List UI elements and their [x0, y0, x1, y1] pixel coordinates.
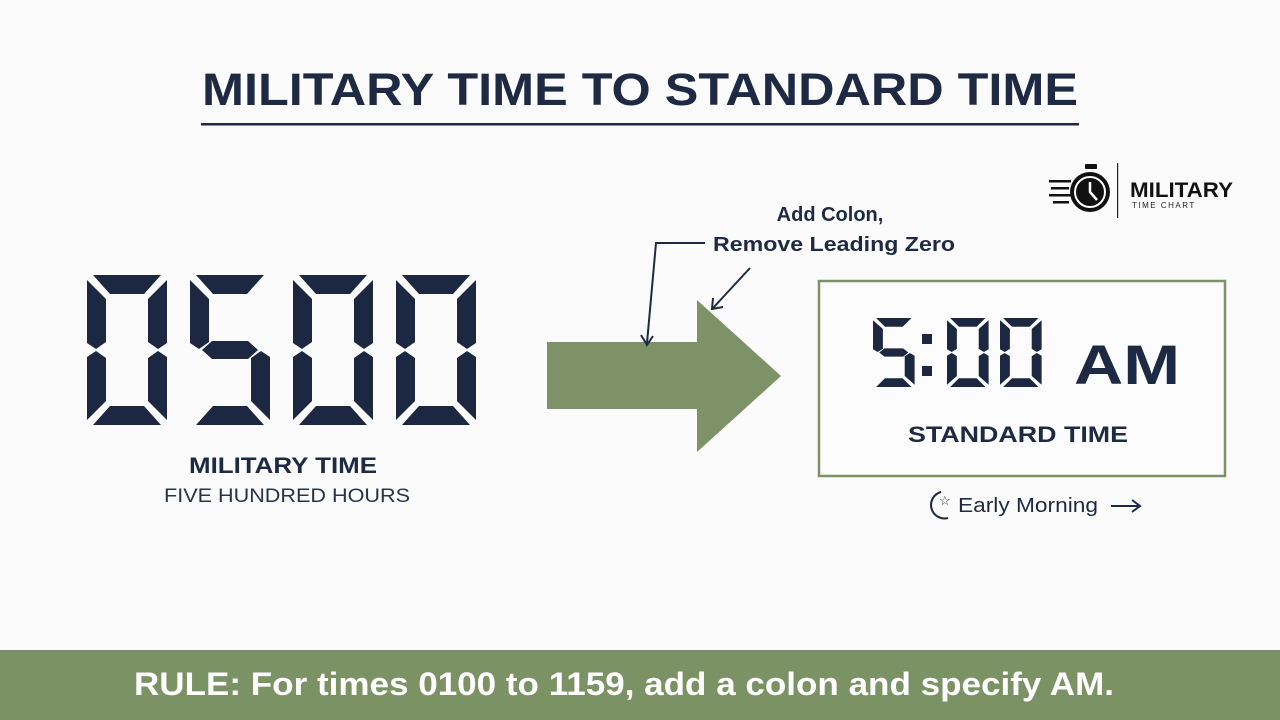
logo: military time chart: MILITARY [1130, 179, 1233, 202]
arrow: conversion [547, 300, 781, 452]
arrow: right [1111, 500, 1140, 512]
panel: standard time: AM [1074, 333, 1180, 396]
military time label: MILITARY TIME [189, 453, 377, 478]
rule banner: RULE: For times 0100 to 1159, add a colon and specify AM. [134, 666, 1114, 702]
early morning note: ☆ [939, 493, 951, 508]
panel: standard time: STANDARD TIME [908, 422, 1128, 447]
early morning note [931, 492, 1140, 518]
icon: stopwatch [1049, 164, 1110, 212]
panel: standard time [819, 281, 1225, 476]
digits 5:00 [873, 318, 1042, 387]
logo: military time chart: TIME CHART [1132, 201, 1196, 210]
annotation: add colon remove leading zero: Remove Leading Zero [713, 234, 955, 256]
annotation: add colon remove leading zero [641, 204, 955, 345]
rule banner [0, 650, 1280, 720]
icon: moon and star [931, 492, 948, 518]
early morning note: Early Morning [958, 495, 1098, 517]
military time label: FIVE HUNDRED HOURS [164, 486, 410, 507]
military time digits 0500 [87, 275, 476, 425]
title: MILITARY TIME TO STANDARD TIME [202, 64, 1078, 115]
annotation: add colon remove leading zero: Add Colon, [777, 204, 883, 226]
logo: military time chart [1049, 163, 1233, 218]
military time label [164, 453, 410, 507]
